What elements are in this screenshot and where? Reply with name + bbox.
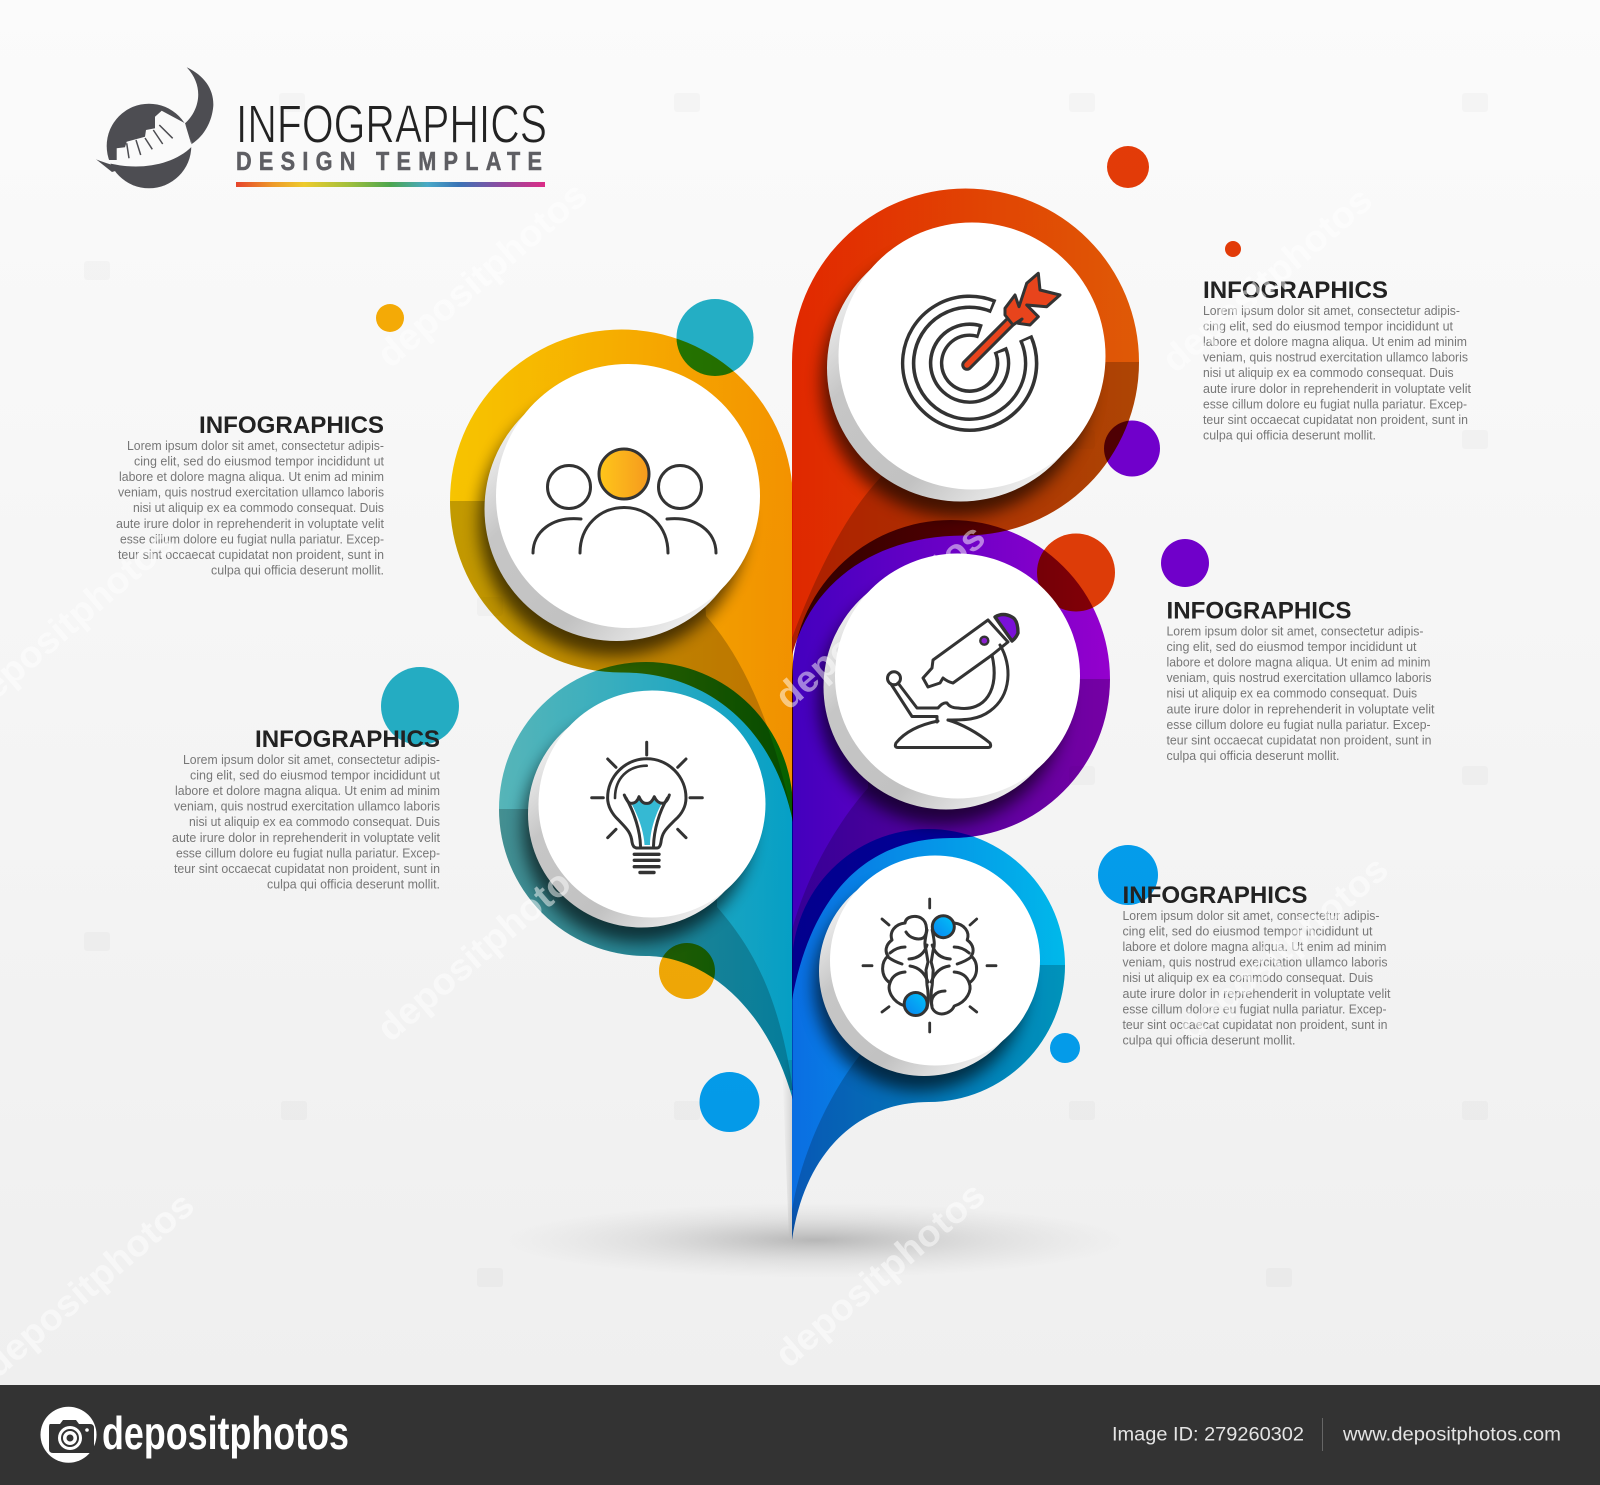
text block: top left: esse cillum dolore eu fugiat nulla pariatur. Excep- [120,532,384,546]
footer logo mark [40,1407,96,1463]
image id: Image ID: 279260302 [1112,1424,1304,1446]
logo [96,67,213,188]
text block: top left: INFOGRAPHICS [199,412,384,439]
text block: middle right: Lorem ipsum dolor sit amet, consectetur adipis- [1166,624,1424,638]
title line 1: INFOGRAPHICS [236,94,547,154]
text block: top right: Lorem ipsum dolor sit amet, consectetur adipis- [1203,304,1460,318]
watermark text: depositphotos [767,1174,993,1375]
text block: top left: aute irure dolor in reprehenderit in voluptate velit [116,517,384,531]
text block: lower right: aute irure dolor in reprehenderit in voluptate velit [1122,987,1391,1001]
disc rim [528,700,755,928]
text block: lower left: cing elit, sed do eiusmod tempor incididunt ut [190,768,440,782]
footer bar [0,1385,1600,1485]
text block: middle right: INFOGRAPHICS [1166,598,1352,624]
text block: middle right: esse cillum dolore eu fugiat nulla pariatur. Excep- [1166,718,1430,732]
text block: lower right: teur sint occaecat cupidatat non proident, sunt in [1122,1018,1388,1032]
floor shadow [500,1202,1130,1278]
text block: top right: teur sint occaecat cupidatat non proident, sunt in [1203,413,1468,427]
text block: top left [116,412,384,577]
watermark text: depositphotos [1170,848,1396,1049]
watermark camera marks [84,93,1488,1287]
text block: lower right: labore et dolore magna aliqua. Ut enim ad minim [1122,940,1386,954]
orange teardrop [450,330,793,822]
red teardrop [792,188,1139,655]
text block: lower left: nisi ut aliquip ex ea commodo consequat. Duis [189,815,440,829]
text block: top left: culpa qui officia deserunt mollit. [211,563,384,577]
disc rim [827,234,1094,502]
watermark text: depositphotos [1154,179,1380,380]
text block: middle right: cing elit, sed do eiusmod tempor incididunt ut [1166,640,1417,654]
text block: top right: cing elit, sed do eiusmod tempor incididunt ut [1203,320,1453,334]
text block: lower right: nisi ut aliquip ex ea commodo consequat. Duis [1122,971,1373,985]
text block: top right: culpa qui officia deserunt mollit. [1203,428,1376,442]
text block: lower left: esse cillum dolore eu fugiat nulla pariatur. Excep- [176,846,440,860]
teal teardrop [490,662,793,1110]
text block: top right: aute irure dolor in reprehenderit in voluptate velit [1203,382,1471,396]
text block: lower left: Lorem ipsum dolor sit amet, consectetur adipis- [183,753,440,767]
text block: top right: veniam, quis nostrud exercitation ullamco laboris [1203,351,1468,365]
text block: top left: Lorem ipsum dolor sit amet, consectetur adipis- [127,439,384,453]
title line 2: DESIGN TEMPLATE [236,148,542,176]
text block: lower right: esse cillum dolore eu fugiat nulla pariatur. Excep- [1122,1002,1386,1016]
icon: people [533,449,716,553]
text block: top left: nisi ut aliquip ex ea commodo consequat. Duis [133,501,384,515]
text block: top right [1203,277,1471,442]
purple teardrop [792,520,1120,1010]
watermark text: depositphotos [369,848,595,1049]
disc face [538,690,766,918]
disc face [835,554,1080,798]
text block: lower left [172,726,440,891]
panel: orange drop [450,330,793,822]
text block: middle right: nisi ut aliquip ex ea commodo consequat. Duis [1166,687,1417,701]
disc face [496,364,760,628]
text block: lower right: veniam, quis nostrud exercitation ullamco laboris [1122,956,1388,970]
footer logo wordmark: depositphotos [102,1407,349,1459]
text block: top left: teur sint occaecat cupidatat non proident, sunt in [118,548,384,562]
disc rim [484,377,748,641]
text block: top right: labore et dolore magna aliqua. Ut enim ad minim [1203,335,1467,349]
icon: light bulb [592,742,702,872]
decorative dots [376,146,1241,1132]
icon: microscope [888,614,1018,748]
text block: lower right: cing elit, sed do eiusmod tempor incididunt ut [1122,924,1373,938]
disc rim [819,866,1029,1076]
title [236,94,547,187]
text block: lower left: veniam, quis nostrud exercitation ullamco laboris [174,800,440,814]
text block: top right: INFOGRAPHICS [1203,277,1388,304]
panel: purple drop [792,520,1120,1010]
panel: teal drop [490,662,793,1110]
stem shadow [782,1060,792,1240]
text block: middle right: labore et dolore magna aliqua. Ut enim ad minim [1166,656,1430,670]
watermark text: depositphotos [369,174,595,375]
text block: lower right [1122,882,1391,1047]
text block: middle right: teur sint occaecat cupidatat non proident, sunt in [1166,733,1432,747]
icon: brain [863,899,996,1032]
text block: middle right: veniam, quis nostrud exercitation ullamco laboris [1166,671,1432,685]
text block: lower left: aute irure dolor in reprehenderit in voluptate velit [172,831,440,845]
disc rim [824,564,1068,810]
disc face [838,222,1106,490]
blue teardrop [792,829,1075,1245]
text block: lower left: INFOGRAPHICS [255,726,440,753]
disc face [830,856,1040,1066]
text block: top right: esse cillum dolore eu fugiat nulla pariatur. Excep- [1203,397,1467,411]
text block: middle right: aute irure dolor in reprehenderit in voluptate velit [1166,702,1435,716]
text block: lower right: culpa qui officia deserunt mollit. [1122,1033,1296,1047]
icon: target [908,273,1060,425]
site address: www.depositphotos.com [1342,1424,1561,1446]
text block: middle right: culpa qui officia deserunt mollit. [1166,749,1340,763]
watermark text [0,174,1396,1385]
text block: lower left: teur sint occaecat cupidatat non proident, sunt in [174,862,440,876]
panel: red drop [792,188,1139,655]
text block: middle right [1166,598,1435,763]
watermark text: depositphotos [767,516,993,717]
text block: top left: labore et dolore magna aliqua. Ut enim ad minim [119,470,384,484]
text block: top left: veniam, quis nostrud exercitation ullamco laboris [118,486,384,500]
text block: lower right: INFOGRAPHICS [1122,882,1308,909]
rainbow rule [236,182,545,187]
text block: lower left: culpa qui officia deserunt mollit. [267,877,440,891]
text block: top right: nisi ut aliquip ex ea commodo consequat. Duis [1203,366,1454,380]
text block: top left: cing elit, sed do eiusmod tempor incididunt ut [134,454,384,468]
text block: lower left: labore et dolore magna aliqua. Ut enim ad minim [175,784,440,798]
panel: blue drop [792,829,1075,1245]
text block: lower right: Lorem ipsum dolor sit amet, consectetur adipis- [1122,909,1380,923]
